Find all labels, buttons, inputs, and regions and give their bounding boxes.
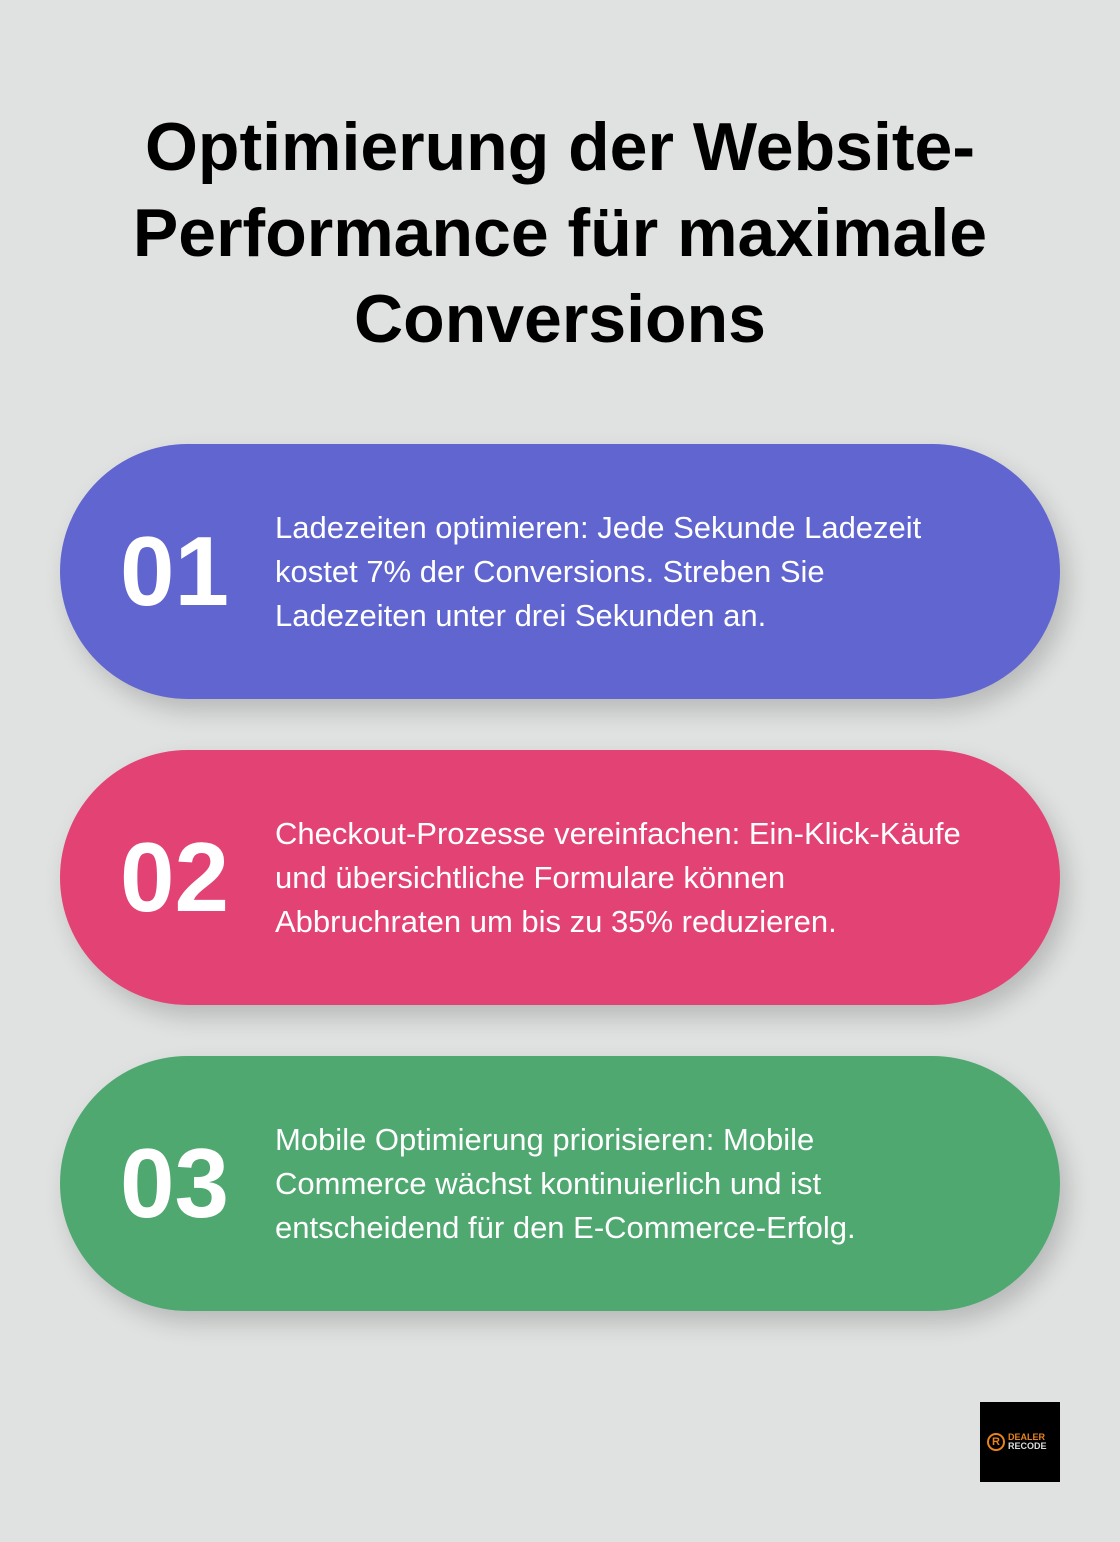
logo text: RECODE <box>1008 1441 1047 1451</box>
text 02 <box>275 816 961 939</box>
text 03: Mobile Optimierung priorisieren: Mobile <box>275 1122 814 1157</box>
text 02: Abbruchraten um bis zu 35% reduzieren. <box>275 904 837 939</box>
number 01: 01 <box>120 516 229 626</box>
title: Optimierung der Website- <box>145 109 975 185</box>
text 01: kostet 7% der Conversions. Streben Sie <box>275 554 825 589</box>
number 02: 02 <box>120 822 229 932</box>
card 03 <box>60 1056 1060 1311</box>
title: Performance für maximale <box>133 195 987 271</box>
logo <box>980 1402 1060 1482</box>
title <box>133 109 987 357</box>
text 01: Ladezeiten unter drei Sekunden an. <box>275 598 766 633</box>
text 01: Ladezeiten optimieren: Jede Sekunde Ladezeit <box>275 510 921 545</box>
icon: logo R: R <box>992 1436 1000 1448</box>
text 01 <box>275 510 921 633</box>
icon: logo R <box>987 1433 1005 1451</box>
number 03: 03 <box>120 1128 229 1238</box>
text 03: entscheidend für den E-Commerce-Erfolg. <box>275 1210 856 1245</box>
text 02: Checkout-Prozesse vereinfachen: Ein-Klick-Käufe <box>275 816 961 851</box>
text 03: Commerce wächst kontinuierlich und ist <box>275 1166 821 1201</box>
title: Conversions <box>354 281 766 357</box>
card 01 <box>60 444 1060 699</box>
text 03 <box>275 1122 856 1245</box>
card 02 <box>60 750 1060 1005</box>
logo text <box>1008 1432 1047 1451</box>
text 02: und übersichtliche Formulare können <box>275 860 785 895</box>
logo text: DEALER <box>1008 1432 1045 1442</box>
